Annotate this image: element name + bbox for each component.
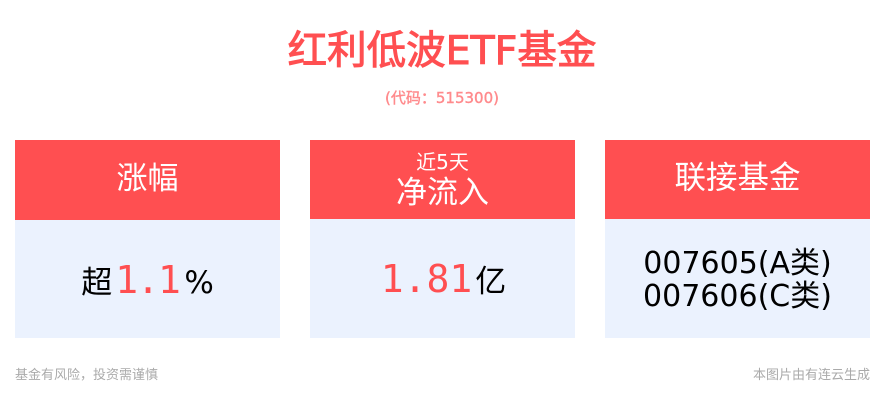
panel header: gain: 涨幅 <box>116 161 178 197</box>
header small text: 近5天 <box>416 150 469 174</box>
panel header: feeder funds: 联接基金 <box>674 160 800 196</box>
panel header: feeder funds <box>605 140 870 219</box>
panel: gain <box>15 140 280 338</box>
fund code A: 007605(A类) <box>643 246 832 281</box>
header main text: 净流入 <box>396 175 489 211</box>
panel value: gain: 超1.1% <box>81 258 214 302</box>
subtitle: fund code: (代码：515300) <box>385 89 499 107</box>
risk disclaimer: 基金有风险，投资需谨慎 <box>15 368 158 383</box>
panel header: gain <box>15 140 280 220</box>
panel: feeder funds <box>605 140 870 338</box>
panel value: net inflow <box>312 219 575 338</box>
panel value: feeder fund codes <box>605 219 870 338</box>
panel: net inflow <box>310 140 575 338</box>
panel value: gain <box>15 220 280 338</box>
title: 红利低波ETF基金 <box>288 28 596 74</box>
source note: 本图片由有连云生成 <box>753 368 870 383</box>
panel header: net inflow <box>310 140 575 219</box>
panel value: net inflow: 1.81亿 <box>381 257 506 301</box>
fund code C: 007606(C类) <box>643 279 832 314</box>
